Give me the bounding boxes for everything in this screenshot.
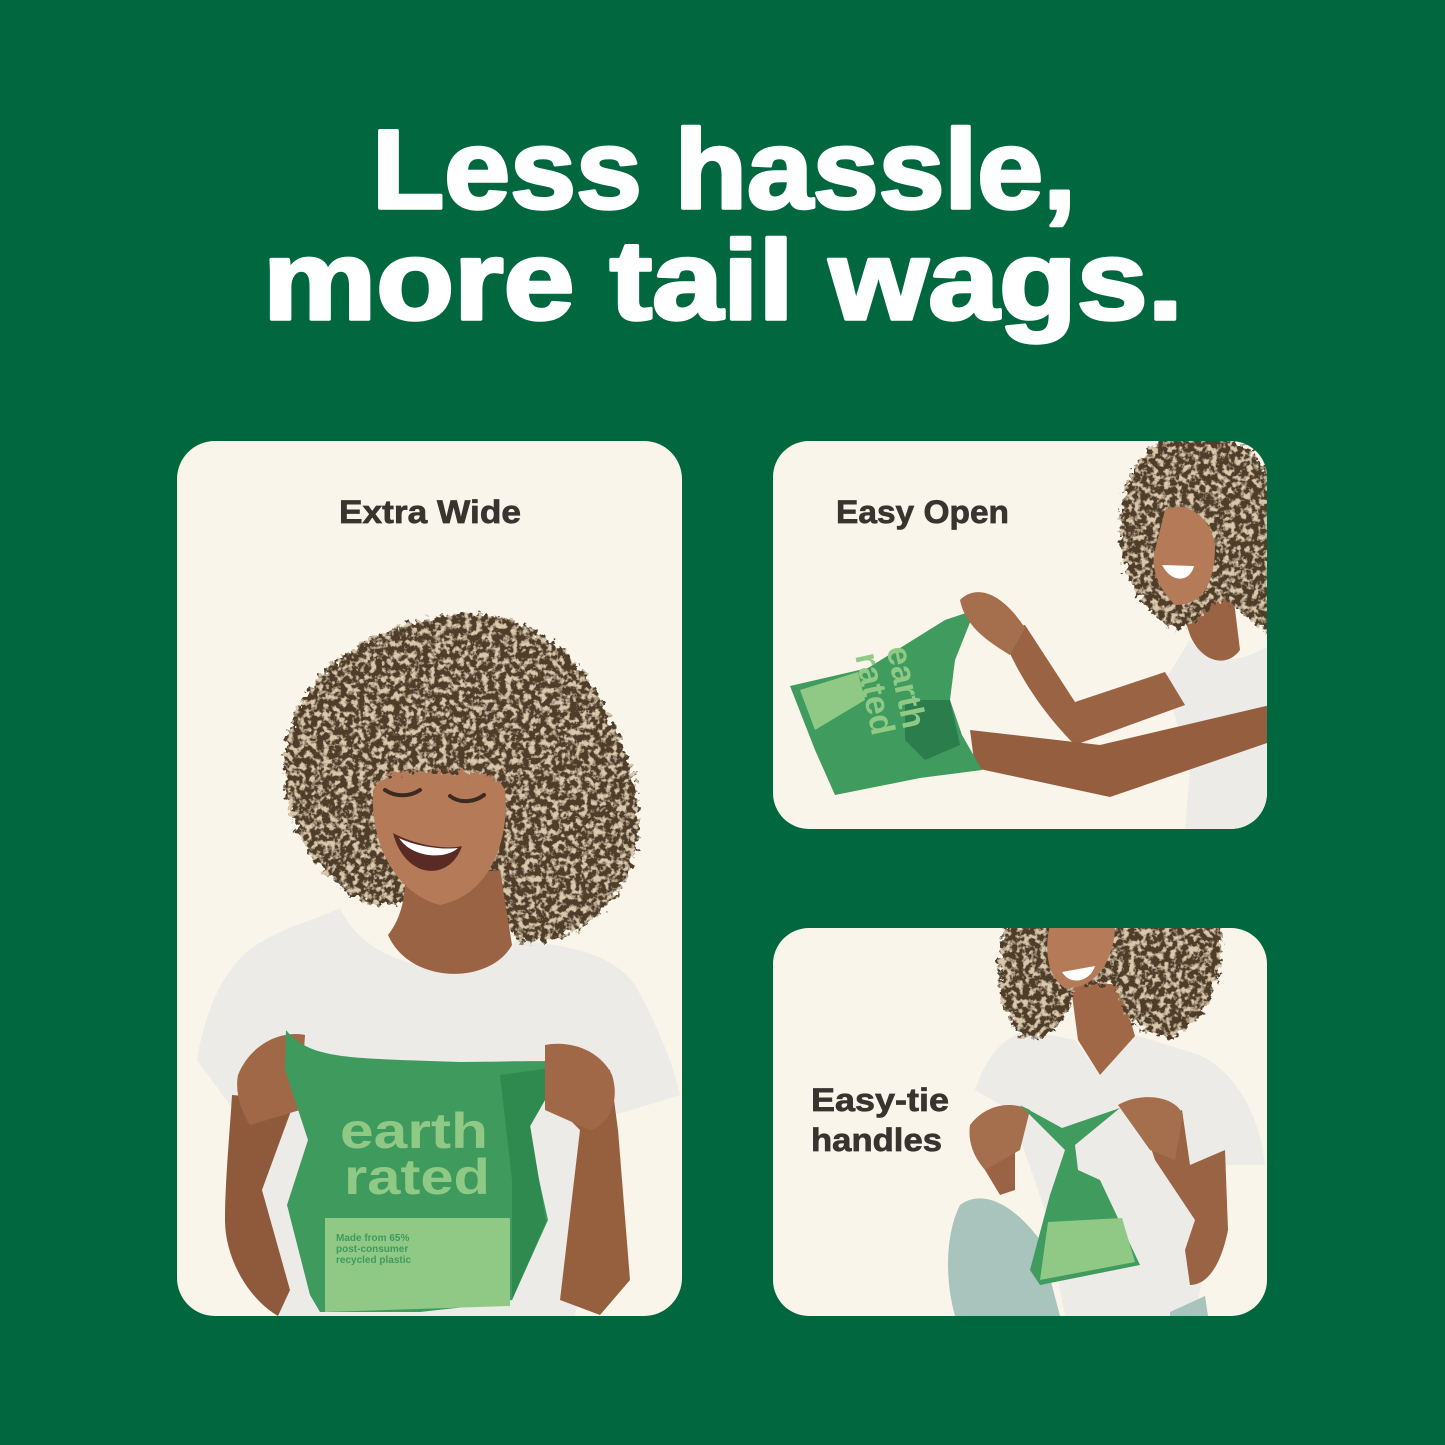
eyes (385, 790, 484, 801)
mouth (1162, 565, 1194, 579)
shirt (197, 908, 680, 1316)
left arm (225, 1095, 295, 1316)
heading: extra wide: Extra Wide (339, 494, 521, 530)
bag label (1040, 1218, 1135, 1280)
bag logo: rated (344, 1149, 490, 1205)
bag label text: post-consumer (336, 1244, 408, 1255)
lower arm (970, 705, 1270, 797)
face (373, 756, 506, 905)
upper arm (1000, 625, 1185, 745)
hair fringe (355, 739, 525, 800)
right arm (560, 1070, 630, 1315)
photo: woman opening bag (790, 430, 1280, 829)
hair (284, 614, 638, 942)
right hand (545, 1044, 615, 1130)
bag shading (500, 1069, 546, 1300)
neck (1070, 980, 1135, 1075)
face (1154, 507, 1215, 605)
right arm (1145, 1110, 1228, 1285)
panel: extra wide (177, 441, 682, 1316)
shirt (975, 1030, 1265, 1316)
bag lighter panel (800, 672, 865, 730)
bag label text (336, 1233, 411, 1266)
hands (960, 592, 1025, 655)
title (263, 107, 1183, 343)
mouth (393, 833, 462, 871)
bag logo: rated (847, 649, 902, 738)
bag label text: Made from 65% (336, 1233, 409, 1244)
shirt (1165, 640, 1270, 829)
bag logo: earth (879, 643, 933, 732)
right hand (1118, 1097, 1183, 1160)
hair (999, 925, 1222, 1038)
heading: easy-tie handles: Easy-tie (811, 1082, 949, 1118)
jeans right (1170, 1296, 1208, 1316)
bag (1020, 1105, 1140, 1285)
hands (970, 1105, 1030, 1170)
photo: woman holding bag (197, 614, 680, 1316)
hair (1117, 441, 1267, 634)
bag logo (342, 1112, 486, 1194)
neck (388, 870, 512, 974)
panel: easy-tie handles (773, 925, 1267, 1316)
panel: easy open (773, 430, 1280, 829)
photo: woman tying bag (948, 925, 1265, 1316)
heading: easy-tie handles: handles (811, 1122, 942, 1158)
bag label (325, 1218, 510, 1312)
bag (285, 1030, 570, 1312)
jeans (948, 1198, 1060, 1316)
heading: easy open: Easy Open (836, 494, 1009, 530)
left arm (975, 1125, 1015, 1195)
bag (790, 610, 982, 795)
bag logo: earth (340, 1103, 488, 1159)
bag shadow (905, 700, 960, 760)
neck (1186, 596, 1240, 661)
heading: easy-tie handles (813, 1087, 948, 1152)
bag logo (856, 648, 925, 734)
face (1047, 925, 1115, 988)
title: more tail wags. (263, 218, 1183, 343)
title: Less hassle, (372, 107, 1076, 232)
bag label text: recycled plastic (336, 1255, 411, 1266)
left hand (237, 1034, 305, 1125)
mouth (1062, 966, 1095, 981)
teeth (399, 838, 458, 855)
